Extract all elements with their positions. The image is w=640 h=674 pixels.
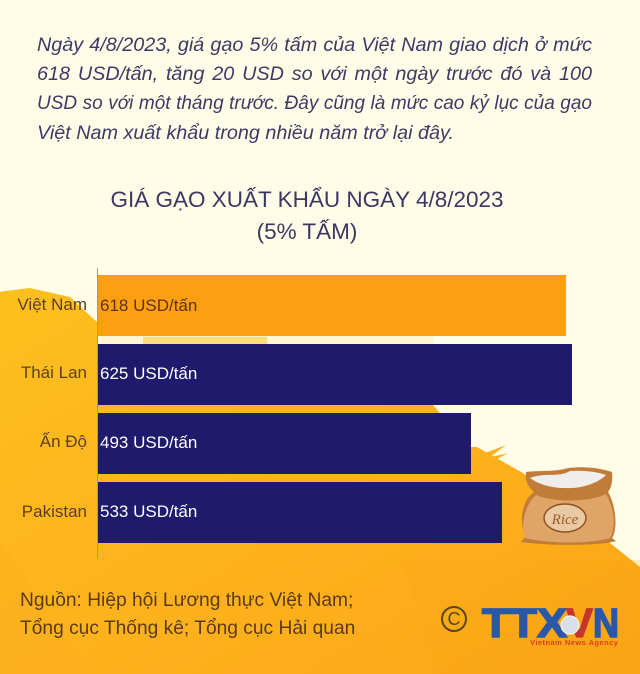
bar: Pakistan: Pakistan [22,502,87,521]
bar: Thái Lan: 625 USD/tấn [100,364,197,383]
logo: TTXVN: V [566,600,594,646]
tagline: Vietnam News Agency [530,638,619,647]
source text: Nguồn: Hiệp hội Lương thực Việt Nam; [20,590,353,611]
bar: Việt Nam [17,275,566,336]
icon: rice sack [521,467,616,545]
bar: Ấn Độ: Ấn Độ [40,432,87,451]
intro paragraph: USD so với một tháng trước. Đây cũng là mức cao kỷ lục của gạo [37,93,592,114]
source text [20,590,355,639]
intro paragraph: 618 USD/tấn, tăng 20 USD so với một ngày trước đó và 100 [37,63,592,85]
intro paragraph [37,34,592,144]
bar: Pakistan: 533 USD/tấn [100,502,197,521]
intro paragraph: Ngày 4/8/2023, giá gạo 5% tấm của Việt Nam giao dịch ở mức [37,34,592,56]
bar: Thái Lan: Thái Lan [21,363,87,382]
bar: Pakistan [22,482,502,543]
source text: Tổng cục Thống kê; Tổng cục Hải quan [20,618,355,639]
logo: TTXVN [482,600,619,647]
bar: Việt Nam: 618 USD/tấn [100,296,197,315]
chart title: GIÁ GẠO XUẤT KHẨU NGÀY 4/8/2023 [110,187,504,212]
bar: Thái Lan [21,344,572,405]
chart title: (5% TẤM) [257,219,357,244]
bar: Ấn Độ: 493 USD/tấn [100,433,197,452]
icon: copyright mark: C [448,609,460,629]
bar chart [17,268,572,559]
bar: Việt Nam: Việt Nam [17,295,87,314]
label: Rice: Rice [551,512,579,528]
logo: TTXVN: N [593,600,619,646]
axis line [97,268,98,559]
intro paragraph: Việt Nam xuất khẩu trong nhiều năm trở lại đây. [37,122,454,144]
icon: copyright mark [441,606,467,632]
bar: Ấn Độ [40,413,471,474]
logo: TTXVN: TTX [482,600,567,646]
chart title [110,186,504,244]
